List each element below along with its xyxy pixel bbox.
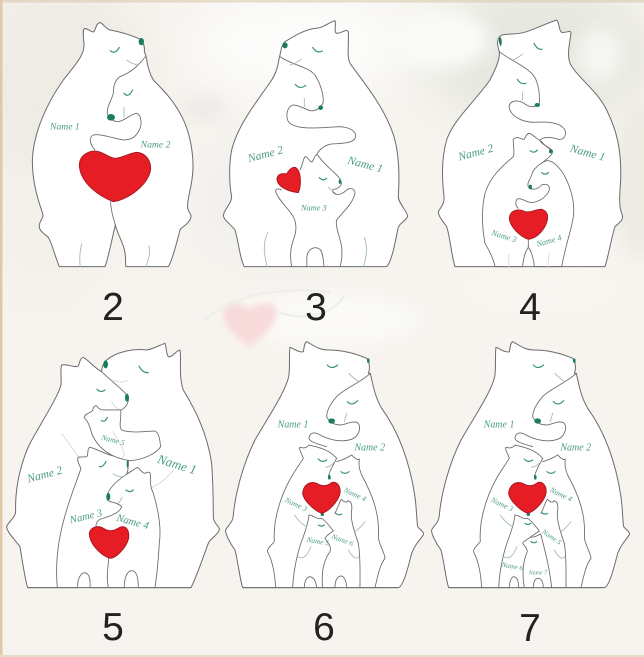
panel: family of 7: Name 2 bbox=[559, 443, 591, 454]
heart bbox=[509, 482, 546, 513]
panel: family of 4: Name 4 bbox=[534, 233, 563, 249]
faces bbox=[295, 47, 327, 180]
panel: family of 6: Name 3 bbox=[283, 495, 309, 514]
number 2: 2 bbox=[102, 286, 124, 329]
panel: family of 6: Name 4 bbox=[342, 485, 368, 504]
small cubs bbox=[243, 499, 398, 588]
panel: family of 7: Name 6 bbox=[500, 561, 524, 572]
panel: family of 5 bbox=[7, 343, 219, 588]
heart bbox=[509, 209, 548, 239]
second bear head and small cub bbox=[84, 372, 161, 461]
panel: family of 5: Name 1 bbox=[155, 451, 198, 477]
number 3: 3 bbox=[305, 286, 327, 329]
panel: family of 6 bbox=[226, 342, 423, 588]
heart bbox=[277, 167, 300, 193]
grey hidden arms bbox=[62, 380, 173, 488]
faces bbox=[517, 43, 549, 174]
faces bbox=[97, 366, 148, 492]
heart bbox=[303, 482, 340, 513]
bear silhouette bbox=[223, 21, 408, 267]
faces bbox=[318, 365, 358, 526]
name labels: Name 1 bbox=[49, 121, 80, 132]
panel: family of 4: Name 1 bbox=[568, 142, 607, 164]
panel: family of 6: Name 5 bbox=[305, 535, 330, 548]
number 6: 6 bbox=[313, 606, 335, 649]
hugging arm line bbox=[499, 52, 565, 151]
name labels: Name 2 bbox=[456, 142, 495, 164]
faces bbox=[110, 47, 133, 95]
panel: family of 7: Name 4 bbox=[548, 485, 574, 504]
number 4: 4 bbox=[519, 286, 541, 329]
faces bbox=[524, 365, 564, 543]
panel: family of 7: Name 5 bbox=[540, 527, 563, 547]
name labels: Name 1 bbox=[483, 419, 514, 430]
name labels: Name 2 bbox=[245, 143, 285, 165]
panel: family of 4: Name 3 bbox=[489, 228, 518, 244]
panel: family of 2 bbox=[32, 23, 193, 267]
heart bbox=[89, 527, 129, 558]
number 5: 5 bbox=[102, 606, 124, 649]
hugging arm and head lines bbox=[90, 56, 146, 225]
bear pair silhouette bbox=[32, 23, 193, 267]
hugging arm line bbox=[515, 373, 576, 447]
panel: family of 5: Name 4 bbox=[114, 513, 150, 532]
cub outline bbox=[276, 155, 355, 267]
panel: family of 6: Name 6 bbox=[329, 531, 355, 548]
middle cubs bbox=[474, 445, 591, 588]
number 7: 7 bbox=[519, 607, 541, 650]
panel: family of 3 bbox=[223, 21, 408, 267]
bear silhouette bbox=[7, 343, 219, 588]
small cubs bbox=[449, 499, 604, 588]
name labels: Name 2 bbox=[25, 464, 64, 486]
panel: family of 6: Name 2 bbox=[353, 443, 385, 454]
hugging arm line bbox=[309, 373, 370, 447]
name labels: Name 1 bbox=[277, 419, 308, 430]
panel: family of 5: Name 5 bbox=[100, 432, 126, 447]
bear silhouette bbox=[432, 342, 629, 588]
lower cubs bbox=[28, 447, 191, 588]
cub outlines bbox=[482, 133, 574, 267]
heart bbox=[79, 151, 151, 202]
panel: family of 5: Name 3 bbox=[68, 508, 103, 526]
panel: family of 7: Name 7 bbox=[528, 570, 548, 576]
panel: family of 2: Name 2 bbox=[140, 140, 171, 151]
hugging arm line bbox=[280, 57, 356, 155]
panel: family of 3: Name 1 bbox=[345, 153, 384, 176]
panel: family of 7: Name 3 bbox=[489, 495, 515, 514]
middle cubs bbox=[268, 445, 385, 588]
panel: family of 4 bbox=[438, 20, 623, 267]
panel: family of 7 bbox=[432, 342, 629, 588]
bear silhouette bbox=[226, 342, 423, 588]
bear silhouette bbox=[438, 20, 623, 267]
panel: family of 3: Name 3 bbox=[300, 204, 327, 213]
